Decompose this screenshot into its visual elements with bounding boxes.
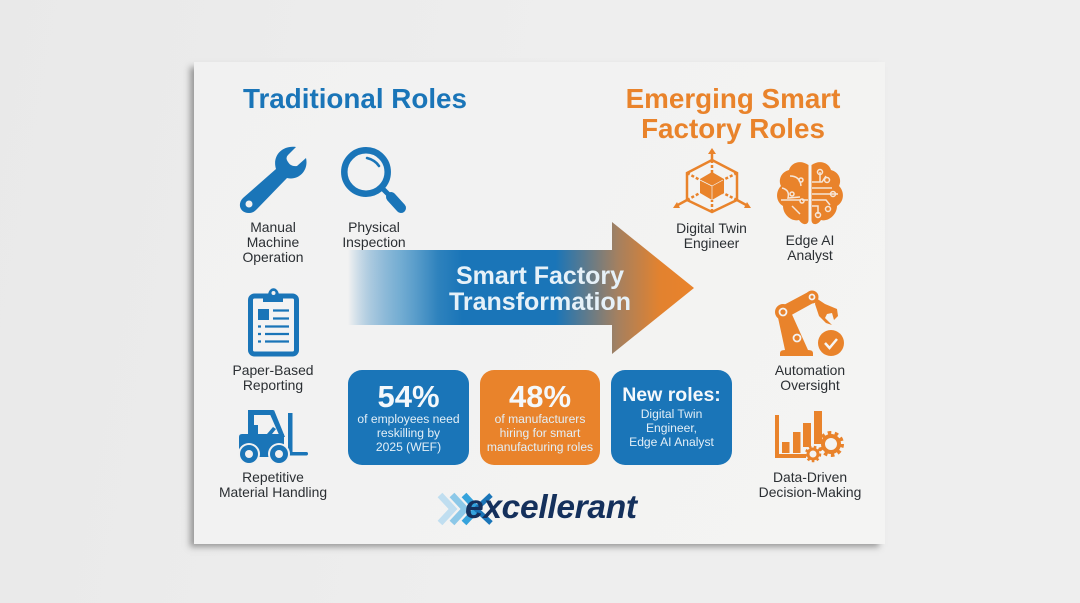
- icon: logo chevrons: [438, 492, 493, 526]
- paper sheet: [194, 62, 885, 544]
- role: manual machine operation: [240, 146, 306, 265]
- stat card: 54%: 2025 (WEF): [376, 440, 441, 454]
- role: automation oversight: Automation: [775, 362, 845, 378]
- role: manual machine operation: Manual: [250, 219, 296, 235]
- arrow label: [449, 262, 631, 316]
- role: data-driven decision-making: Data-Driven: [773, 469, 847, 485]
- arrow label: Smart Factory: [456, 262, 624, 290]
- role: digital twin engineer: [673, 148, 751, 251]
- stat card: 54%: 54%: [377, 379, 440, 414]
- role: repetitive material handling: Material Handling: [219, 484, 327, 500]
- role: edge ai analyst: Analyst: [787, 247, 833, 263]
- stat card: 54%: [348, 370, 469, 465]
- role: physical inspection: [341, 147, 406, 250]
- heading: traditional roles: Traditional Roles: [243, 83, 467, 114]
- role: digital twin engineer: Digital Twin: [676, 220, 747, 236]
- role: paper-based reporting: [232, 288, 314, 393]
- stat card: new roles: Engineer,: [646, 421, 697, 435]
- stat card: 48%: hiring for smart: [500, 426, 580, 440]
- stat card: new roles: [611, 370, 732, 465]
- role: paper-based reporting: Reporting: [243, 377, 303, 393]
- logo: excellerant: excellerant: [465, 489, 637, 526]
- stat card: new roles: Edge AI Analyst: [629, 435, 714, 449]
- stat card: 48%: 48%: [509, 379, 571, 414]
- role: automation oversight: [774, 290, 845, 393]
- role: data-driven decision-making: [759, 411, 861, 500]
- stat card: new roles: New roles:: [622, 384, 721, 406]
- heading: emerging smart factory roles: [626, 83, 840, 144]
- icon: clipboard: [248, 288, 299, 356]
- role: automation oversight: Oversight: [780, 377, 840, 393]
- role: manual machine operation: Machine: [247, 234, 299, 250]
- icon: robot arm with check: [775, 290, 844, 356]
- heading: emerging smart factory roles: Factory Roles: [641, 113, 825, 144]
- role: repetitive material handling: Repetitive: [242, 469, 304, 485]
- heading: emerging smart factory roles: Emerging Smart: [626, 83, 840, 114]
- stat card: 48%: manufacturing roles: [487, 440, 593, 454]
- role: physical inspection: Inspection: [342, 234, 406, 250]
- icon: brain with circuits: [777, 162, 843, 224]
- role: edge ai analyst: Edge AI: [786, 232, 834, 248]
- role: data-driven decision-making: Decision-Making: [759, 484, 861, 500]
- role: digital twin engineer: Engineer: [684, 235, 739, 251]
- role: manual machine operation: Operation: [242, 249, 304, 265]
- icon: wrench: [240, 146, 306, 213]
- stat card: 54%: reskilling by: [377, 426, 440, 440]
- stat card: 48%: [480, 370, 600, 465]
- role: edge ai analyst: [777, 162, 843, 263]
- icon: forklift: [239, 410, 308, 463]
- stat card: 54%: of employees need: [357, 412, 460, 426]
- arrow: smart factory transformation: [350, 222, 694, 354]
- icon: magnifying glass: [341, 147, 406, 213]
- role: paper-based reporting: Paper-Based: [232, 362, 314, 378]
- stat card: 48%: of manufacturers: [495, 412, 585, 426]
- icon: digital twin cube: [673, 148, 751, 214]
- role: repetitive material handling: [219, 410, 327, 500]
- role: physical inspection: Physical: [348, 219, 400, 235]
- icon: bar chart with gears: [775, 411, 844, 462]
- arrow label: Transformation: [449, 288, 631, 316]
- stat card: new roles: Digital Twin: [641, 407, 702, 421]
